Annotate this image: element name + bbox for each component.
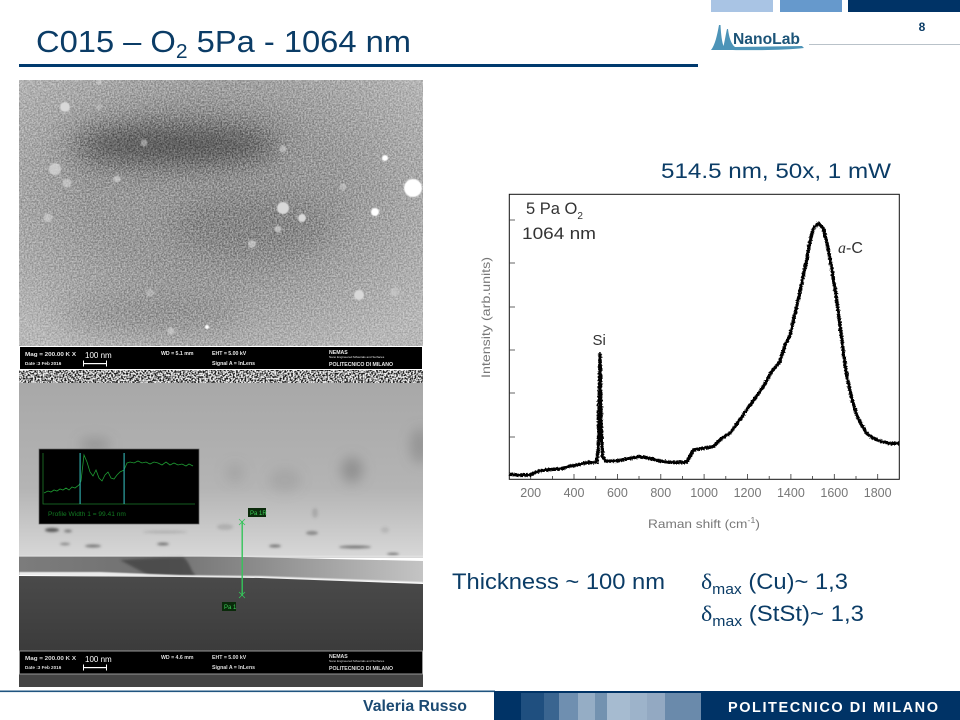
SEM info bar: cross section: 100 nm xyxy=(85,655,112,664)
x axis labels: 1800 xyxy=(864,486,892,500)
peak label: a-C: a-C xyxy=(838,240,863,257)
SEM image: top-view surface xyxy=(19,79,423,346)
SEM info bar: cross section: WD = 4.6 mm xyxy=(161,655,194,661)
title: C015 – O xyxy=(36,24,169,59)
secondary emission values: max xyxy=(712,614,743,630)
SEM info bar: cross section: POLITECNICO DI MILANO xyxy=(329,666,393,672)
SEM info bar: top image: POLITECNICO DI MILANO xyxy=(329,362,393,368)
SEM info bar: top image: EHT = 5.00 kV xyxy=(212,351,247,357)
spectrum line xyxy=(509,223,899,475)
SEM info bar: cross section: Date :3 Feb 2016 xyxy=(25,665,62,670)
x axis title: -1 xyxy=(747,516,756,525)
secondary emission values: δ xyxy=(701,569,712,594)
Raman spectrum chart xyxy=(479,194,899,531)
sample annotation: 2 xyxy=(577,211,583,222)
footer banner xyxy=(494,691,960,720)
thickness measurement marker: Pa 1R xyxy=(250,511,267,517)
x axis labels: 600 xyxy=(607,486,628,500)
SEM info bar: cross section: EHT = 5.00 kV xyxy=(212,655,247,661)
SEM info bar: cross section xyxy=(20,651,422,674)
sample annotation: 5 Pa O xyxy=(526,200,577,218)
y axis title: Intensity (arb.units) xyxy=(479,257,493,378)
SEM info bar: cross section: Nano Engineered MAterials and Surfaces xyxy=(329,659,385,663)
SEM info bar: cross section: Signal A = InLens xyxy=(212,665,255,671)
title underline xyxy=(19,64,698,67)
SEM info bar: top image: 100 nm xyxy=(85,351,112,360)
x axis labels: 800 xyxy=(650,486,671,500)
secondary emission values xyxy=(701,569,864,630)
sample annotation xyxy=(522,200,596,243)
peak label: Si: Si xyxy=(592,332,606,349)
x axis labels: 1200 xyxy=(734,486,761,500)
profile inset xyxy=(39,449,199,524)
SEM info bar: top image: Date :3 Feb 2016 xyxy=(25,361,62,366)
SEM info bar: top image: WD = 5.1 mm xyxy=(161,351,194,357)
NanoLab logo: NanoLab xyxy=(733,31,800,48)
SEM info bar: top image xyxy=(19,346,423,370)
x axis labels: 1600 xyxy=(820,486,848,500)
x axis labels: 1000 xyxy=(690,486,718,500)
thickness measurement marker xyxy=(222,508,267,611)
SEM info bar: top image: Mag = 200.00 K X xyxy=(25,352,77,358)
page number: 8 xyxy=(919,20,926,34)
SEM info bar: cross section: NEMAS xyxy=(329,654,348,660)
secondary emission values: (StSt)~ 1,3 xyxy=(742,601,864,626)
SEM info bar: top image: Nano Engineered MAterials and Surfaces xyxy=(329,355,385,359)
x axis labels: 200 xyxy=(520,486,541,500)
thickness measurement marker: Pa 1 xyxy=(224,605,237,611)
SEM info bar: cross section: Mag = 200.00 K X xyxy=(25,656,77,662)
title: 5Pa - 1064 nm xyxy=(188,24,411,59)
footer rule xyxy=(0,690,495,692)
secondary emission values: max xyxy=(712,582,743,598)
x axis title: Raman shift (cm xyxy=(648,517,735,531)
title: 2 xyxy=(176,41,188,63)
measurement conditions label: 514.5 nm, 50x, 1 mW xyxy=(661,160,891,183)
x axis title: ) xyxy=(755,517,760,531)
SEM info bar: top image: NEMAS xyxy=(329,350,348,356)
axis ticks xyxy=(509,220,878,479)
x axis labels: 1400 xyxy=(777,486,805,500)
x axis labels: 400 xyxy=(564,486,584,500)
sample annotation: 1064 nm xyxy=(522,225,596,243)
x axis labels xyxy=(520,486,892,500)
header rule xyxy=(809,44,960,45)
header accent bars xyxy=(711,0,960,12)
SEM image: cross section xyxy=(19,383,430,687)
secondary emission values: (Cu)~ 1,3 xyxy=(742,569,848,594)
plot frame xyxy=(509,194,899,479)
footer banner: POLITECNICO DI MILANO xyxy=(728,700,938,716)
footer author: Valeria Russo xyxy=(363,698,467,715)
SEM image: noisy top edge strip xyxy=(19,370,423,383)
profile inset: Profile Width 1 = 99.41 nm xyxy=(48,511,126,518)
NanoLab logo xyxy=(711,25,804,50)
SEM info bar: top image: Signal A = InLens xyxy=(212,361,255,367)
secondary emission values: δ xyxy=(701,601,712,626)
thickness value: Thickness ~ 100 nm xyxy=(452,569,665,594)
